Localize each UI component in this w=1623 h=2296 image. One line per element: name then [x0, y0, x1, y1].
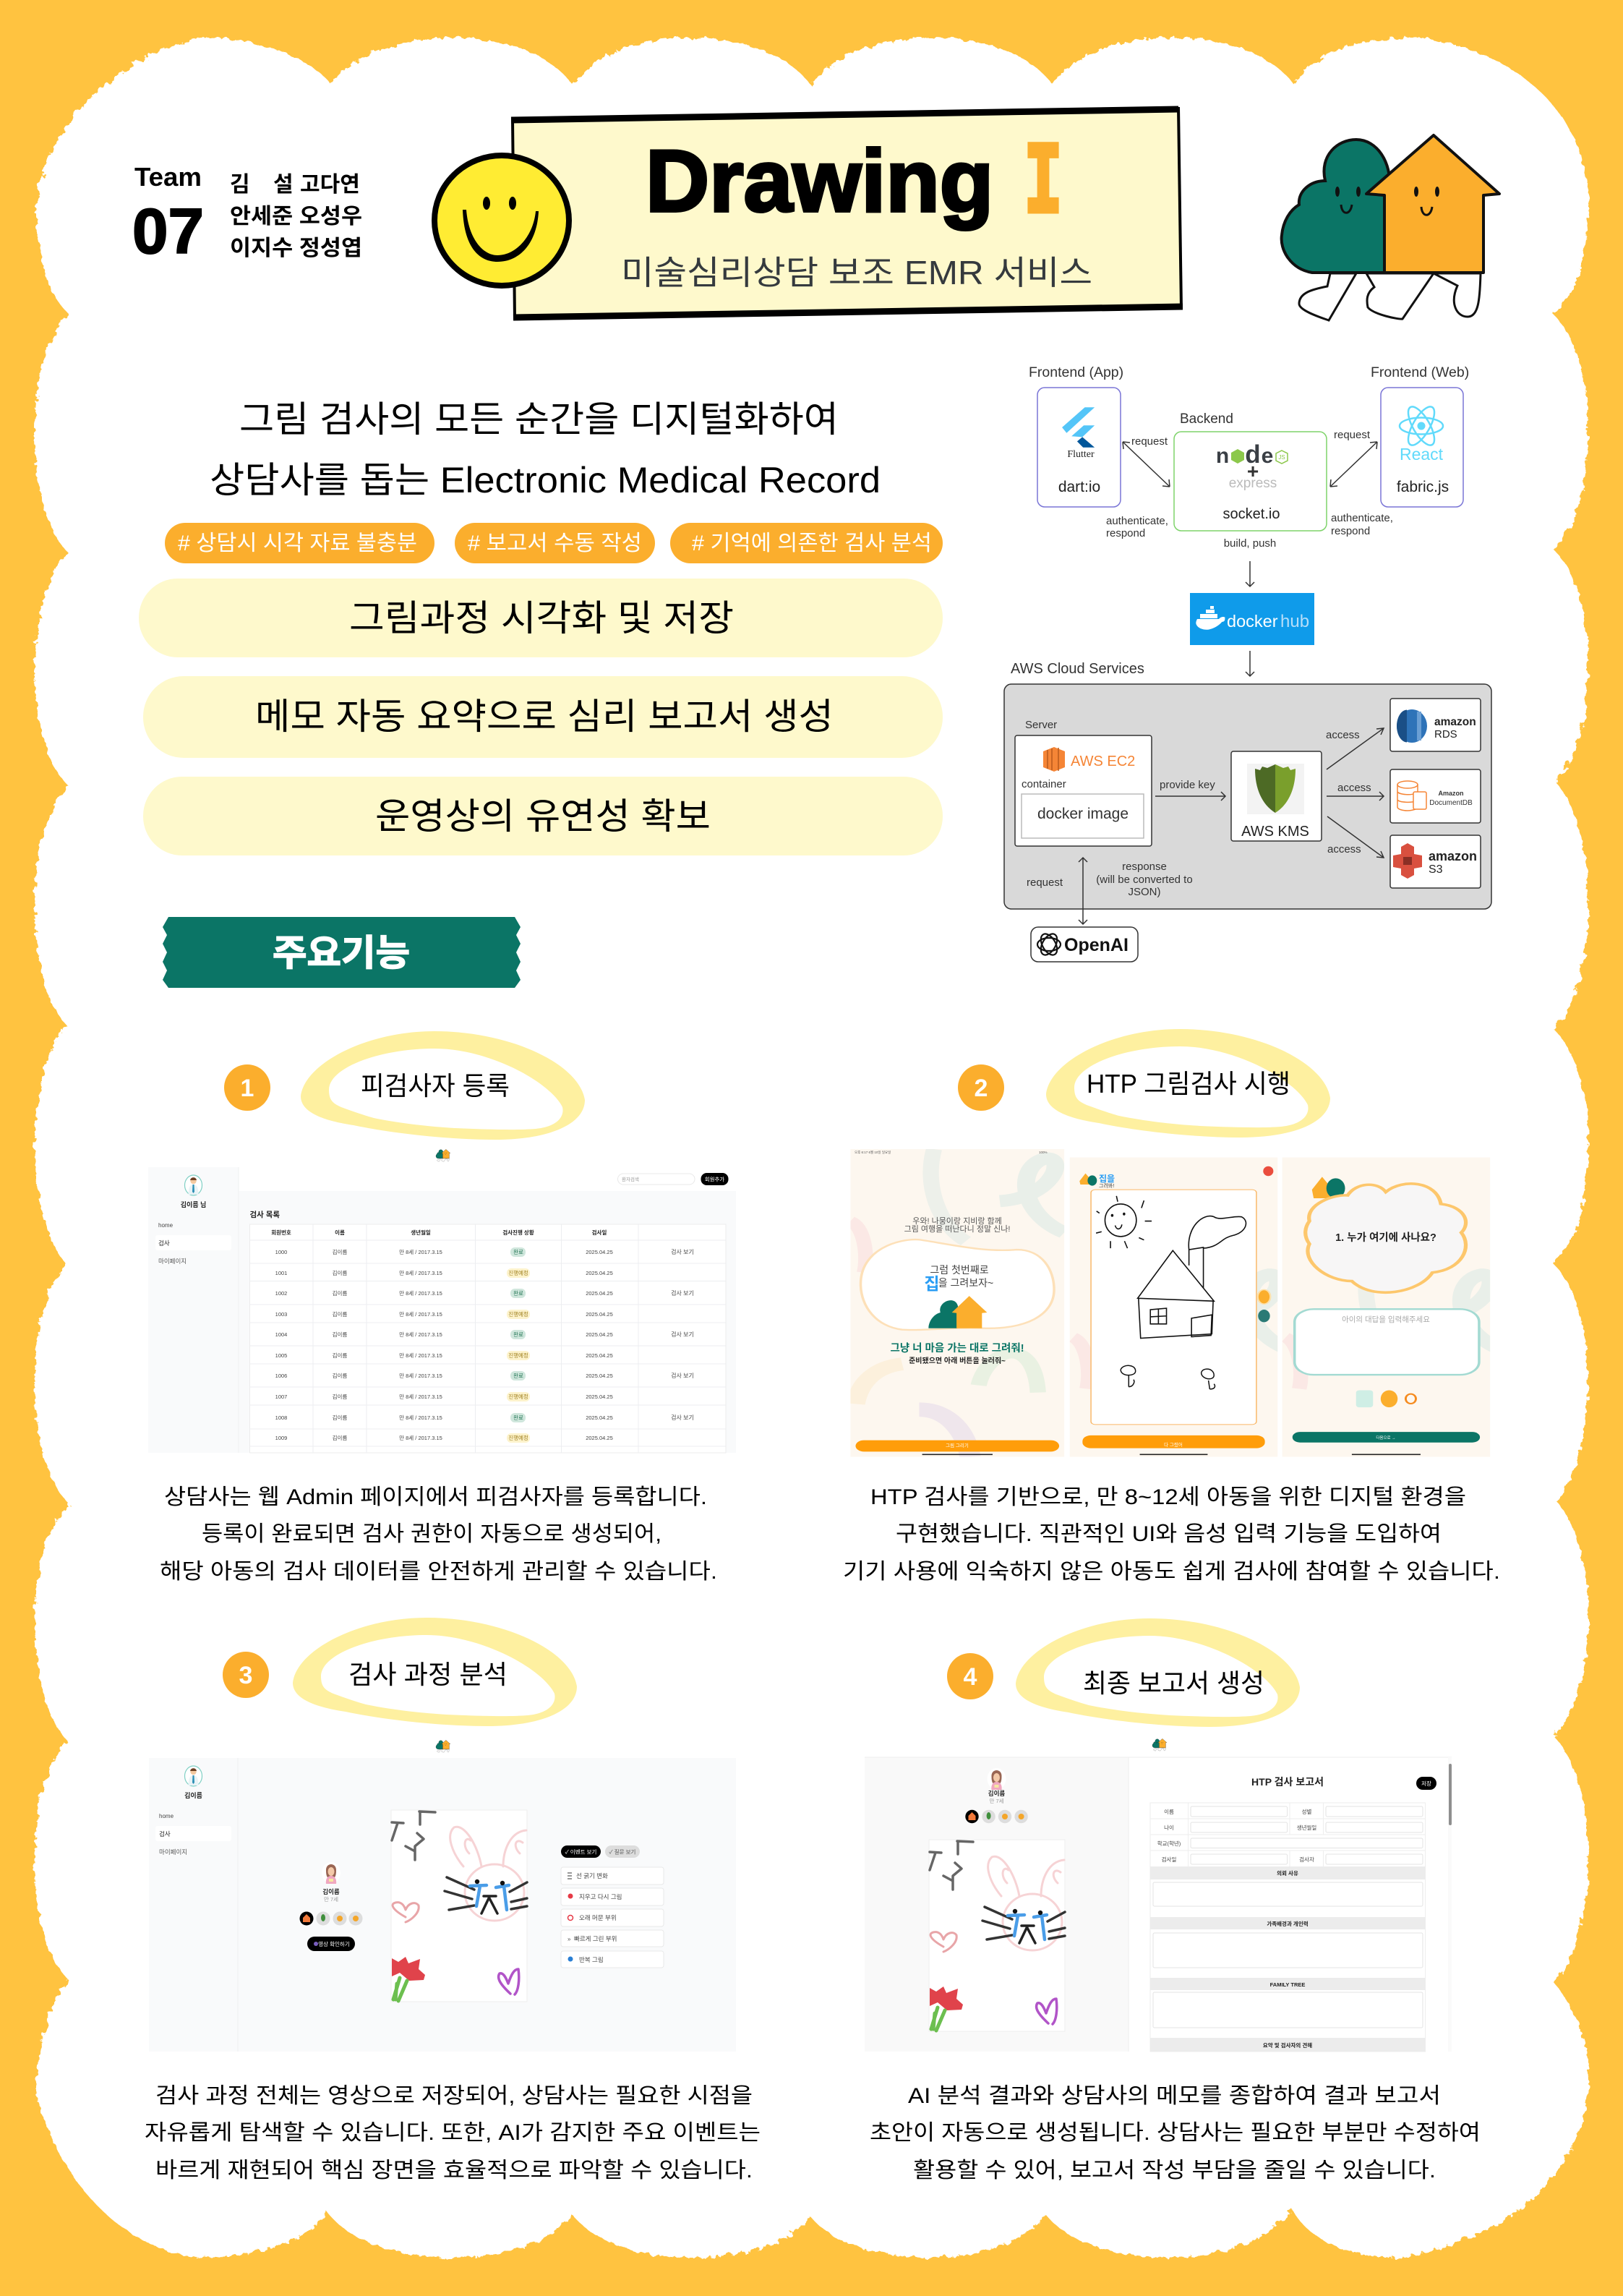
search bar: 회원추가	[705, 1176, 724, 1183]
report form: 학교(학년)	[1157, 1840, 1181, 1847]
backend box: JS	[1278, 454, 1285, 461]
feature 2 tablet screen 1: 을 그려보자~	[938, 1277, 993, 1289]
docker hub logo: hub	[1280, 612, 1309, 631]
child profile	[299, 1862, 363, 1951]
feature 2 tablet screen 1: 그림 그리기	[946, 1442, 969, 1448]
exam table: 진행예정	[508, 1310, 528, 1318]
sidebar menu	[155, 1200, 231, 1265]
report form: 나이	[1164, 1824, 1174, 1831]
feature 1 heading: 피검사자 등록	[361, 1071, 510, 1101]
exam table: 2025.04.25	[586, 1352, 613, 1359]
feature 4 description: 초안이 자동으로 생성됩니다. 상담사는 필요한 부분만 수정하여	[870, 2121, 1481, 2145]
exam table: 만 8세 / 2017.3.15	[399, 1331, 442, 1338]
exam table: 만 8세 / 2017.3.15	[399, 1435, 442, 1441]
event list cards: 오래 머문 부위	[579, 1914, 617, 1921]
exam table: 검사 보기	[671, 1414, 694, 1421]
feature 1 admin screenshot	[148, 1167, 736, 1453]
diagram labels: requests: respond	[1331, 525, 1370, 537]
child profile: 영상 확인하기	[318, 1940, 350, 1947]
feature 4 heading	[947, 1618, 1300, 1727]
feature 2 heading	[958, 1029, 1330, 1138]
diagram labels: requests: request	[1334, 429, 1371, 441]
child profile and buttons: 김이름	[988, 1790, 1005, 1797]
solution pill 3: 운영상의 유연성 확보	[375, 796, 711, 837]
title text: Drawing	[646, 132, 993, 230]
feature 2 tablet screen 1	[850, 1149, 1064, 1456]
event list cards: »	[568, 1936, 571, 1942]
feature 2 tablet screen 3 with question cloud: 아이의 대답을 입력해주세요	[1342, 1315, 1430, 1324]
section banner: key features	[163, 917, 521, 988]
feature 3 heading: 검사 과정 분석	[348, 1660, 508, 1689]
report form: 성별	[1302, 1808, 1311, 1815]
exam table: 2025.04.25	[586, 1394, 613, 1400]
subtitle: 미술심리상담 보조 EMR 서비스	[621, 254, 1092, 291]
feature 3 description: 검사 과정 전체는 영상으로 저장되어, 상담사는 필요한 시점을	[155, 2084, 753, 2108]
problem tags	[165, 523, 943, 563]
feature 2 tablet screen 1: 그럼 첫번째로	[930, 1264, 989, 1276]
exam table: 2025.04.25	[586, 1414, 613, 1421]
diagram labels: requests: request	[1131, 435, 1168, 448]
report form: 가족배경과 개인력	[1267, 1920, 1309, 1927]
OpenAI link: OpenAI	[1064, 935, 1129, 955]
feature 2 description: HTP 검사를 기반으로, 만 8~12세 아동을 위한 디지털 환경을	[870, 1485, 1466, 1509]
frontend web box: fabric.js	[1397, 479, 1449, 495]
server box: container	[1022, 778, 1066, 790]
feature 4 report screenshot	[865, 1757, 1452, 2052]
exam table: 검사 보기	[671, 1331, 694, 1338]
exam table: 1004	[275, 1331, 287, 1338]
feature 1 heading: 1	[241, 1075, 254, 1102]
feature 2 tablet screen 2 with child house drawing	[1070, 1157, 1278, 1456]
feature 2 tablet screen 1: 그림 여행을 떠난다니 정말 신나!	[904, 1224, 1010, 1234]
exam table: 1002	[275, 1290, 287, 1297]
child profile and buttons	[965, 1768, 1028, 1823]
feature 2 tablet screen 1: 100%	[1039, 1151, 1048, 1154]
exam table: 만 8세 / 2017.3.15	[399, 1270, 442, 1276]
diagram labels: requests	[1106, 429, 1393, 550]
feature 2 tablet screen 1: 오후 6:17 6월 10일 일요일	[855, 1150, 891, 1155]
feature 3 analysis screenshot: 검사	[159, 1830, 171, 1838]
feature 2 tablet screen 2 with child house drawing: 그려봐!	[1099, 1182, 1114, 1189]
report form: 의뢰 사유	[1277, 1869, 1298, 1877]
exam table: 2025.04.25	[586, 1373, 613, 1379]
OpenAI link: (will be converted to	[1096, 874, 1193, 886]
exam table: 김이름	[333, 1248, 347, 1255]
feature 2 description: 기기 사용에 익숙하지 않은 아동도 쉽게 검사에 참여할 수 있습니다.	[843, 1560, 1500, 1584]
OpenAI link: JSON)	[1128, 886, 1161, 898]
backend box: +	[1247, 460, 1259, 482]
report form	[1150, 1803, 1426, 2052]
feature 4 heading: 최종 보고서 생성	[1083, 1668, 1264, 1698]
child profile: 김이름	[322, 1888, 340, 1895]
exam table: 완료	[513, 1414, 523, 1421]
feature 2 tablet screen 1: 그냥 너 마음 가는 대로 그려줘!	[890, 1342, 1024, 1354]
feature 1 description: 상담사는 웹 Admin 페이지에서 피검사자를 등록합니다.	[164, 1485, 707, 1509]
feature 1 description: 등록이 완료되면 검사 권한이 자동으로 생성되어,	[202, 1522, 661, 1546]
feature 3 heading	[223, 1618, 577, 1726]
feature 4 description: 활용할 수 있어, 보고서 작성 부담을 줄일 수 있습니다.	[913, 2159, 1436, 2182]
smiley icon	[434, 155, 569, 286]
team label: 07	[132, 195, 204, 267]
feature 2 tablet screen 2 with child house drawing: 집을	[1099, 1174, 1115, 1184]
backend box: d	[1245, 440, 1261, 469]
exam table: 만 8세 / 2017.3.15	[399, 1373, 442, 1379]
feature 2 tablet screen 3 with question cloud	[1282, 1157, 1491, 1456]
doctor avatar	[185, 1175, 202, 1195]
server box: AWS EC2	[1071, 754, 1135, 769]
report title	[1251, 1757, 1452, 2052]
exam table: 진행예정	[508, 1352, 528, 1359]
exam table: 2025.04.25	[586, 1311, 613, 1318]
sidebar menu: 검사	[158, 1239, 170, 1247]
team label: Team	[134, 162, 202, 192]
team member names	[230, 173, 362, 260]
event toggle buttons: ✓ 이벤트 보기	[565, 1848, 596, 1856]
exam table: 진행예정	[508, 1434, 528, 1441]
server box: docker image	[1037, 806, 1129, 822]
solution pill 3	[143, 777, 943, 855]
team member names: 이지수 정성엽	[230, 236, 362, 260]
server box	[1015, 719, 1152, 846]
feature 2 tablet screen 1: 우와! 나뭉이랑 지비랑 함께	[912, 1216, 1002, 1226]
event toggle buttons	[561, 1845, 640, 1858]
exam table: 2025.04.25	[586, 1249, 613, 1255]
feature 2 heading: 2	[975, 1075, 988, 1102]
solution pill 1: 그림과정 시각화 및 저장	[349, 598, 734, 639]
exam table: 검사 보기	[671, 1248, 694, 1255]
table title: 검사 목록	[250, 1210, 280, 1219]
exam table: 검사진행 상황	[502, 1229, 534, 1236]
exam table: 완료	[513, 1331, 523, 1338]
exam table: 김이름	[333, 1414, 347, 1421]
docker hub logo: docker	[1227, 612, 1278, 631]
exam table: 생년월일	[411, 1229, 431, 1236]
frontend app box	[1029, 364, 1123, 507]
exam table: 2025.04.25	[586, 1331, 613, 1338]
exam table: 김이름	[333, 1331, 347, 1338]
exam table: 김이름	[333, 1434, 347, 1441]
report form: 생년월일	[1297, 1824, 1316, 1831]
report form: 검사일	[1162, 1856, 1176, 1863]
solution pill 2: 메모 자동 요약으로 심리 보고서 생성	[255, 696, 834, 737]
server box: Server	[1025, 719, 1057, 731]
title card	[511, 107, 1183, 320]
exam table: 만 8세 / 2017.3.15	[399, 1394, 442, 1400]
exam table: 2025.04.25	[586, 1435, 613, 1441]
RDS box: amazon	[1434, 716, 1476, 728]
access arrows: access	[1337, 782, 1371, 794]
feature 3 mini logo	[436, 1740, 450, 1752]
title letter I: I	[1024, 127, 1062, 242]
frontend app box: dart:io	[1058, 479, 1100, 495]
exam table: 만 8세 / 2017.3.15	[399, 1249, 442, 1255]
exam table: 검사 보기	[671, 1372, 694, 1379]
mascots: cloud and house	[1282, 135, 1499, 320]
access arrows	[1326, 728, 1384, 858]
event list cards: 반복 그림	[579, 1956, 604, 1963]
exam table: 김이름	[333, 1269, 347, 1276]
exam table: 완료	[513, 1373, 523, 1379]
backend box: Backend	[1180, 411, 1233, 427]
frontend app box: Frontend (App)	[1029, 364, 1123, 380]
event toggle buttons: ✓ 질문 보기	[609, 1848, 635, 1856]
exam table: 진행예정	[508, 1393, 528, 1400]
OpenAI link	[1027, 858, 1193, 962]
exam table: 만 8세 / 2017.3.15	[399, 1352, 442, 1359]
exam table: 완료	[513, 1249, 523, 1255]
event list cards: 선 굵기 변화	[576, 1872, 608, 1879]
search bar	[617, 1173, 729, 1185]
diagram arrows	[1123, 442, 1377, 676]
child drawing: rabbit	[929, 1840, 1065, 2031]
exam table: 검사 보기	[671, 1289, 694, 1297]
AWS panel	[1004, 684, 1491, 909]
exam table: 회원번호	[271, 1229, 291, 1236]
exam table	[249, 1224, 726, 1453]
exam table: 진행예정	[508, 1269, 528, 1276]
feature 2 tablet screen 3 with question cloud: 다음으로 →	[1376, 1435, 1396, 1441]
feature 2 heading: HTP 그림검사 시행	[1087, 1069, 1290, 1098]
solution pill 1	[139, 579, 943, 657]
exam table: 김이름	[333, 1372, 347, 1379]
headline: 그림 검사의 모든 순간을 디지털화하여	[239, 399, 839, 440]
OpenAI link: request	[1027, 876, 1063, 889]
team member names: 안세준 오성우	[230, 205, 362, 229]
feature 2 tablet screen 1: 준비됐으면 아래 버튼을 눌러줘~	[909, 1356, 1006, 1365]
feature 1 description	[160, 1485, 717, 1584]
feature 4 mini logo	[1152, 1738, 1167, 1751]
exam table: 만 8세 / 2017.3.15	[399, 1414, 442, 1421]
diagram labels: requests: authenticate,	[1106, 515, 1168, 527]
feature 3 description	[145, 2084, 761, 2182]
feature 1 mini logo	[436, 1149, 450, 1161]
diagram labels: requests: build, push	[1224, 537, 1276, 550]
feature 3 analysis screenshot: 김이름	[184, 1791, 202, 1799]
frontend web box	[1371, 364, 1469, 507]
report title: 저장	[1421, 1780, 1431, 1787]
problem tags: # 기억에 의존한 검사 분석	[692, 532, 932, 555]
team member names: 김	[230, 173, 250, 197]
exam table: 완료	[513, 1290, 523, 1297]
exam table: 2025.04.25	[586, 1270, 613, 1276]
problem tags: # 보고서 수동 작성	[468, 532, 642, 555]
S3 box: amazon	[1429, 849, 1477, 863]
exam table: 1003	[275, 1311, 287, 1318]
feature 3 description: 자유롭게 탐색할 수 있습니다. 또한, AI가 감지한 주요 이벤트는	[145, 2121, 761, 2145]
exam table: 1007	[275, 1394, 287, 1400]
feature 2 tablet screen 3 with question cloud: 1. 누가 여기에 사나요?	[1335, 1232, 1436, 1244]
feature 4 description	[870, 2084, 1481, 2182]
frontend app box: Flutter	[1067, 449, 1095, 460]
exam table: 1000	[275, 1249, 287, 1255]
exam table: 검사일	[592, 1229, 607, 1236]
event list cards: 빠르게 그린 부위	[574, 1935, 617, 1942]
docker hub logo	[1190, 593, 1314, 645]
feature 4 description: AI 분석 결과와 상담사의 메모를 종합하여 결과 보고서	[908, 2084, 1441, 2108]
exam table: 만 8세 / 2017.3.15	[399, 1290, 442, 1297]
KMS box: AWS KMS	[1241, 824, 1309, 840]
solution pill 2	[143, 676, 943, 758]
frontend web box: React	[1400, 445, 1444, 464]
event list cards: 지우고 다시 그림	[579, 1893, 622, 1900]
access arrows: access	[1327, 843, 1361, 855]
S3 box	[1390, 835, 1481, 888]
exam table: 만 8세 / 2017.3.15	[399, 1311, 442, 1318]
backend box: e	[1262, 444, 1273, 468]
provide key arrow: provide key	[1160, 779, 1215, 791]
exam table: 김이름	[333, 1393, 347, 1400]
exam table: 김이름	[333, 1289, 347, 1297]
feature 1 heading	[224, 1031, 585, 1140]
DocumentDB box: DocumentDB	[1429, 799, 1473, 807]
feature 1 description: 해당 아동의 검사 데이터를 안전하게 관리할 수 있습니다.	[160, 1560, 717, 1584]
backend box: n	[1216, 444, 1229, 468]
backend box: express	[1229, 476, 1277, 491]
team member names: 고다연	[300, 173, 360, 197]
problem tags: # 상담시 시각 자료 불충분	[178, 532, 417, 555]
sidebar menu: home	[158, 1222, 174, 1229]
feature 3 description: 바르게 재현되어 핵심 장면을 효율적으로 파악할 수 있습니다.	[155, 2159, 753, 2182]
exam table: 1009	[275, 1435, 287, 1441]
child profile and buttons: 만 7세	[989, 1798, 1004, 1804]
exam table: 이름	[335, 1229, 345, 1236]
frontend web box: Frontend (Web)	[1371, 364, 1469, 380]
exam table: 1005	[275, 1352, 287, 1359]
headline: 상담사를 돕는 Electronic Medical Record	[210, 460, 881, 500]
RDS box: RDS	[1434, 728, 1457, 741]
report form: FAMILY TREE	[1270, 1981, 1305, 1988]
backend box	[1174, 411, 1327, 531]
team label	[132, 162, 204, 267]
section banner: key features: 주요기능	[273, 933, 410, 973]
report title: HTP 검사 보고서	[1251, 1776, 1324, 1788]
OpenAI link: response	[1122, 861, 1167, 873]
exam table: 2025.04.25	[586, 1290, 613, 1297]
provide key arrow	[1155, 779, 1225, 801]
diagram labels: requests: respond	[1106, 527, 1145, 539]
team member names: 설	[273, 173, 294, 197]
DocumentDB box: Amazon	[1438, 790, 1464, 797]
child profile: 만 7세	[324, 1896, 338, 1903]
feature 3 analysis screenshot	[149, 1758, 736, 2052]
diagram labels: requests: authenticate,	[1331, 512, 1393, 524]
exam table: 1006	[275, 1373, 287, 1379]
feature 2 description	[843, 1485, 1500, 1584]
exam table: 김이름	[333, 1352, 347, 1359]
exam table: 1008	[275, 1414, 287, 1421]
KMS box	[1231, 751, 1322, 841]
headline	[210, 399, 881, 500]
feature 2 description: 구현했습니다. 직관적인 UI와 음성 입력 기능을 도입하여	[896, 1522, 1442, 1546]
event list cards	[561, 1867, 664, 1968]
architecture diagram	[1004, 364, 1491, 962]
exam table: 1001	[275, 1270, 287, 1276]
access arrows: access	[1326, 729, 1360, 741]
feature 2 tablet screen 2 with child house drawing: 다 그렸어	[1164, 1441, 1183, 1448]
search bar: 환자검색	[622, 1176, 639, 1182]
exam table: 김이름	[333, 1310, 347, 1318]
report form: 검사자	[1299, 1856, 1314, 1863]
child drawing: rabbit	[391, 1810, 527, 2002]
DocumentDB box	[1390, 769, 1481, 823]
AWS title: AWS Cloud Services	[1011, 661, 1144, 677]
sidebar menu: 김이름 님	[181, 1200, 206, 1208]
RDS box	[1390, 699, 1481, 751]
report form: 요약 및 검사자의 견해	[1263, 2041, 1312, 2049]
feature 3 analysis screenshot: home	[159, 1813, 174, 1819]
feature 3 heading: 3	[239, 1662, 252, 1689]
report form: 이름	[1164, 1808, 1174, 1815]
feature 3 analysis screenshot: 마이페이지	[159, 1848, 187, 1856]
feature 4 heading: 4	[964, 1663, 977, 1691]
sidebar menu: 마이페이지	[158, 1258, 187, 1265]
S3 box: S3	[1429, 863, 1443, 876]
backend box: socket.io	[1223, 506, 1280, 522]
feature 2 tablet screen 1: 집	[924, 1274, 940, 1293]
